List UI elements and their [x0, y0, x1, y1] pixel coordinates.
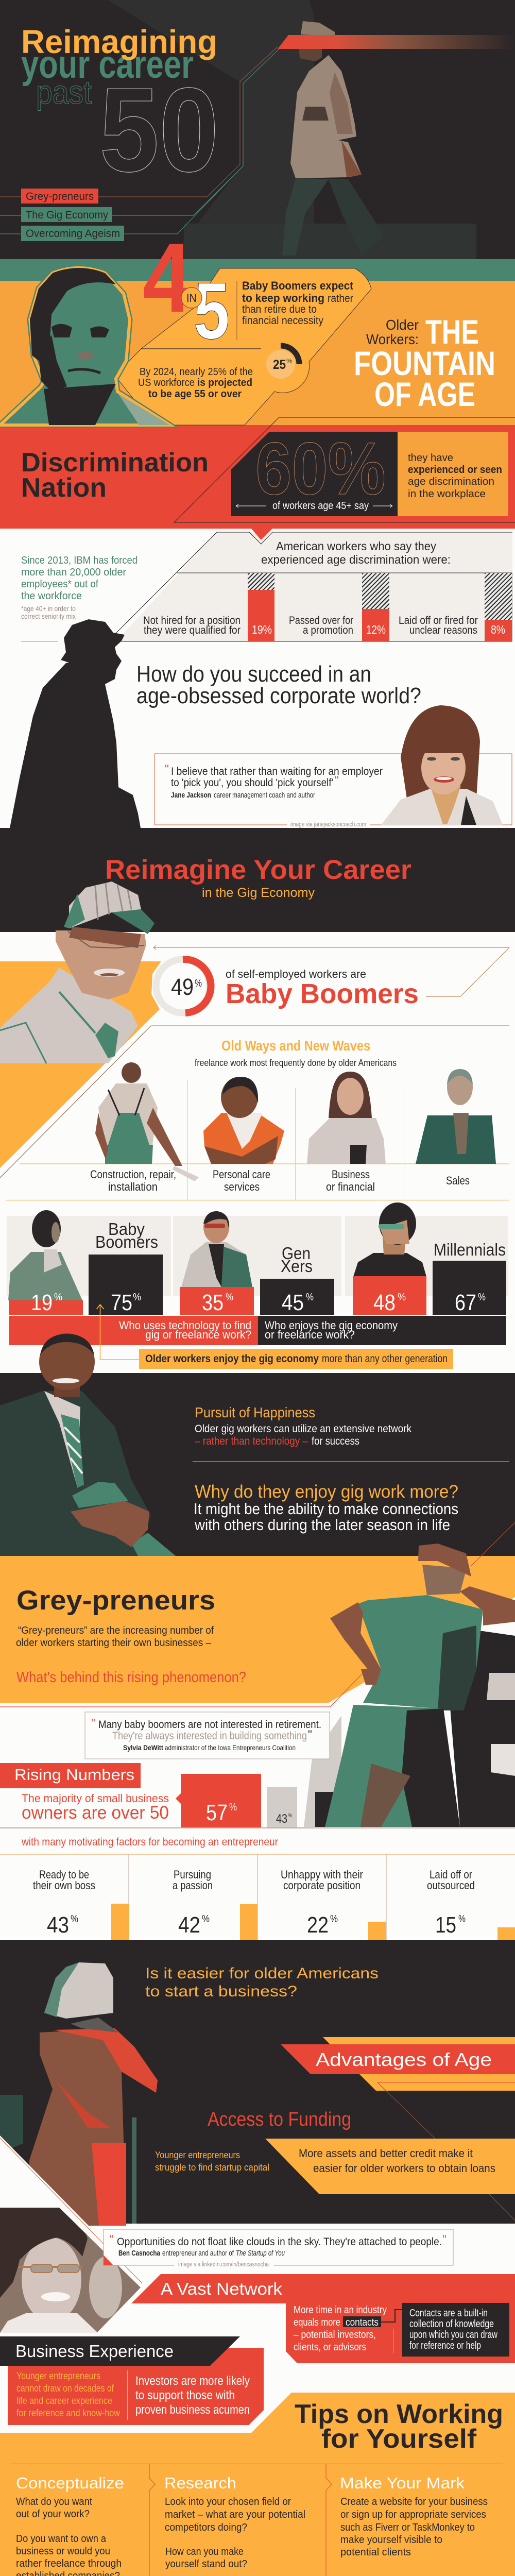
bar values: % [306, 1292, 314, 1303]
panel: tips on working for yourself [0, 2393, 515, 2576]
heading: how do you succeed: How do you succeed in an [136, 662, 371, 687]
panel: business experience: Investors are more likely [135, 2374, 250, 2388]
quote: jane jackson: " [165, 762, 169, 775]
text: definition: “Grey-preneurs” are the increasing number of [18, 1625, 214, 1636]
quote: sylvia dewitt: " [91, 1717, 95, 1730]
text: majority of owners: owners are over 50 [22, 1803, 169, 1823]
panel: hero [0, 0, 515, 259]
text: workforce projection [138, 366, 253, 400]
quote: ben casnocha: Ben Casnocha [118, 2249, 161, 2258]
bar: 57 percent [176, 1774, 261, 1827]
panel: a vast network [131, 2274, 515, 2363]
callout: experienced discrimination: they have [408, 452, 453, 464]
orange backdrop [0, 961, 161, 1168]
occupation labels: Construction, repair, [90, 1168, 176, 1181]
factor: laid off: Laid off or [430, 1868, 472, 1881]
quote: jane jackson: Jane Jackson [171, 791, 211, 800]
text: why do they enjoy: with others during the later season in life [194, 1516, 450, 1534]
panel: pursuit of happiness [0, 1333, 515, 1566]
factor: unhappy: Unhappy with their [281, 1868, 363, 1881]
column: research: competitors doing? [165, 2522, 247, 2533]
panel: advantages of age [0, 1962, 515, 2425]
photo: man portrait [0, 268, 170, 425]
factor: laid off: 15 [435, 1912, 456, 1938]
column: conceptualize: rather freelance through [16, 2558, 122, 2569]
panel: business experience: proven business acumen [135, 2403, 250, 2417]
chart: 25 percent donut [266, 346, 299, 379]
arrow: to 75 percent [97, 1304, 139, 1360]
panel: a vast network: clients, or advisors [294, 2342, 366, 2353]
heading: is it easier: Is it easier for older Americans [145, 1965, 379, 1982]
heading: american workers [261, 539, 451, 566]
stat: 4 in 5: 5 [194, 266, 230, 356]
text: ibm stat [21, 555, 138, 641]
heading: rising numbers: Rising Numbers [14, 1766, 134, 1784]
callout: experienced discrimination [398, 432, 508, 516]
bar values: 45 [282, 1290, 304, 1315]
callout: older workers enjoy [139, 1349, 453, 1369]
heading: older workers: Older [386, 317, 419, 333]
factor: own boss [33, 1868, 129, 1940]
bar values: 19 [31, 1290, 53, 1315]
topic tag: Grey-preneurs: Grey-preneurs [26, 191, 94, 202]
photo: salesman [416, 1069, 496, 1164]
quote: jane jackson: I believe that rather than waiting for an employer [171, 766, 383, 777]
text: younger entrepreneurs: struggle to find startup capital [155, 2162, 269, 2173]
occupation labels: installation [108, 1180, 158, 1193]
title [21, 23, 219, 197]
legend: who enjoys gig economy: Who enjoys the gig economy [265, 1319, 398, 1332]
callout: experienced discrimination: age discrimination [408, 476, 494, 487]
title: past [36, 74, 92, 111]
photo: construction worker [95, 1062, 199, 1181]
column: research: How can you make [165, 2546, 244, 2557]
heading [21, 448, 209, 503]
text: workforce projection: to be age 55 or over [148, 388, 242, 400]
quote: ben casnocha: " [442, 2233, 447, 2246]
grid lines [187, 1080, 404, 1200]
occupation labels: or financial [326, 1180, 375, 1193]
text: baby boomers: Baby Boomers [226, 978, 419, 1009]
panel: gig economy header [0, 855, 509, 1200]
pointer [251, 529, 272, 540]
factor: passion: 42 [178, 1912, 200, 1938]
photo: personal care worker [203, 1077, 284, 1164]
panel: a vast network: Contacts are a built-in [409, 2308, 488, 2319]
heading: is it easier [145, 1965, 379, 2000]
heading: for Yourself [321, 2424, 477, 2454]
text: baby boomers expect: rather [328, 293, 353, 304]
heading: older workers [354, 313, 495, 413]
text: baby boomers: of self-employed workers are [226, 968, 366, 980]
occupation labels [90, 1168, 470, 1193]
text: pursuit of happiness: for success [312, 1435, 359, 1447]
column: research: yourself stand out? [165, 2558, 247, 2570]
heading: Reimagine Your Career [105, 855, 411, 885]
photo: ben casnocha [0, 2208, 144, 2334]
panel: business experience: Business Experience [15, 2342, 174, 2361]
factor: laid off: outsourced [427, 1879, 475, 1892]
callout: experienced discrimination: in the workplace [408, 488, 486, 500]
column: research: Research [164, 2474, 236, 2492]
stat panel shape [115, 268, 371, 425]
factor: laid off [427, 1868, 515, 1940]
heading: old ways and new waves [195, 1038, 397, 1068]
text: motivating factors: with many motivating factors for becoming an entrepreneur [21, 1836, 278, 1848]
chart: 49 percent ring [156, 959, 211, 1013]
callout: older workers enjoy: more than any other generation [322, 1353, 448, 1365]
callout: assets and credit [265, 2139, 515, 2194]
text: baby boomers expect: to keep working [242, 292, 324, 304]
heading: access to funding: Access to Funding [208, 2109, 351, 2130]
panel: a vast network: More time in an industry [294, 2304, 387, 2316]
bar values: 75 [111, 1290, 132, 1315]
heading: Discrimination [21, 448, 209, 478]
silhouette: old man with cane [10, 619, 141, 828]
text: baby boomers expect: financial necessity [242, 315, 323, 327]
quote: jane jackson: " [335, 774, 339, 787]
heading: Nation [21, 473, 107, 503]
topic tag: The Gig Economy: The Gig Economy [26, 209, 108, 221]
topic tag: Overcoming Ageism: Overcoming Ageism [26, 228, 120, 240]
factor: unhappy: % [330, 1913, 338, 1925]
banner: advantages of age [281, 2037, 515, 2091]
quote: sylvia dewitt: " [308, 1728, 312, 1741]
bar values: 67 [455, 1290, 476, 1315]
quote: jane jackson: to 'pick you', you should 'pick yourself' [171, 777, 333, 789]
column: conceptualize: Do you want to own a [16, 2533, 107, 2545]
text: workforce projection: By 2024, nearly 25% of the [140, 366, 253, 378]
title: 50 [99, 63, 219, 197]
stat: 4 in 5: IN [186, 292, 197, 304]
divider line [236, 281, 237, 340]
quote: sylvia dewitt [85, 1712, 330, 1759]
bar chart: discrimination types: 19% [252, 623, 272, 636]
heading [105, 855, 411, 900]
heading: how do you succeed: age-obsessed corporate world? [136, 683, 421, 708]
stat: 60 percent: 60% [255, 427, 386, 510]
factor: own boss: Ready to be [39, 1868, 89, 1881]
quote: ben casnocha [104, 2229, 453, 2268]
occupation labels: Business [332, 1168, 370, 1181]
column: make your mark: Create a website for your business [340, 2496, 488, 2507]
legend: who uses technology [9, 1316, 258, 1345]
factor: own boss: 43 [47, 1912, 69, 1938]
text: ibm stat: more than 20,000 older [21, 567, 126, 578]
column: conceptualize: business or would you [16, 2546, 110, 2557]
panel: discrimination nation [21, 417, 515, 522]
column: make your mark: make yourself visible to [340, 2534, 442, 2546]
connector arrow [153, 945, 509, 996]
text: workforce projection: US workforce [138, 377, 195, 388]
heading: older workers: Workers: [366, 331, 419, 347]
panel: business experience: cannot draw on decades of [16, 2383, 114, 2394]
photo: woman in red coat [0, 1962, 158, 2226]
title: your career [21, 43, 194, 87]
white wedge [0, 2136, 89, 2226]
callout: older workers enjoy: Older workers enjoy the gig economy [145, 1353, 319, 1365]
quote: jane jackson: image via janejacksoncoach.com [290, 820, 366, 828]
bar chart: discrimination types: they were qualified for [144, 624, 241, 636]
panel: business experience [0, 2336, 264, 2425]
factor: unhappy: 22 [307, 1912, 329, 1938]
column: research [164, 2474, 305, 2570]
heading: older workers: THE [425, 313, 479, 351]
text: majority of owners [22, 1792, 169, 1823]
factor: passion [173, 1868, 258, 1940]
text: younger entrepreneurs [155, 2150, 269, 2173]
generation labels: Xers [281, 1257, 313, 1276]
panel: business experience: Younger entrepreneurs [16, 2371, 100, 2382]
panel: a vast network: A Vast Network [161, 2279, 283, 2298]
bar values: % [398, 1292, 406, 1303]
column: make your mark: potential clients [340, 2547, 411, 2558]
text: baby boomers expect [242, 279, 354, 327]
text: pursuit of happiness: – rather than technology – [195, 1435, 308, 1447]
column: make your mark: or sign up for appropriate services [340, 2509, 486, 2520]
text: definition: older workers starting their own businesses – [16, 1637, 212, 1649]
quote: sylvia dewitt: administrator of the Iowa Entrepreneurs Coalition [165, 1743, 296, 1752]
panel: a vast network: equals more [294, 2317, 340, 2328]
generation labels [95, 1219, 506, 1276]
panel: fountain of age [0, 223, 495, 425]
heading [295, 2399, 503, 2454]
stat: 4 in 5: 4 [143, 223, 192, 333]
bar values: % [478, 1292, 486, 1303]
photo: jane jackson [381, 705, 503, 825]
panel: business experience: for reference and know-how [16, 2408, 120, 2419]
heading: old ways and new waves: freelance work most frequently done by older Americans [195, 1058, 397, 1068]
legend: who enjoys gig economy: or freelance work? [265, 1328, 355, 1341]
chart: 25 percent donut: % [286, 358, 292, 364]
column: conceptualize: Conceptualize [16, 2474, 124, 2492]
text: pursuit of happiness: Older gig workers can utilize an extensive network [195, 1423, 411, 1435]
column: conceptualize [16, 2474, 124, 2576]
bar values: % [133, 1292, 141, 1303]
panel: a vast network: collection of knowledge [409, 2318, 494, 2330]
bar values: % [226, 1292, 233, 1303]
quote: ben casnocha: image via linkedin.com/in/bencasnocha [178, 2260, 269, 2268]
bar chart: discrimination types: 8% [491, 623, 505, 636]
text: ibm stat: correct seniority mix [21, 612, 76, 620]
bar chart: discrimination types: 12% [366, 623, 386, 636]
quote: ben casnocha: Opportunities do not float like clouds in the sky. They're attached to people. [117, 2236, 442, 2248]
chart: 49 percent ring: % [195, 978, 202, 989]
photo: business woman [307, 1072, 386, 1164]
text: definition [16, 1625, 246, 1686]
text: baby boomers expect: than retire due to [242, 303, 317, 315]
column: conceptualize: What do you want [16, 2496, 92, 2507]
chart: 25 percent donut: 25 [273, 358, 286, 372]
stat: 60 percent: of workers age 45+ say [272, 500, 369, 512]
heading: old ways and new waves: Old Ways and New Waves [221, 1038, 370, 1054]
bars [9, 1255, 506, 1315]
stat: 4 in 5 [143, 223, 230, 356]
generation labels: Baby [108, 1219, 145, 1239]
factor: passion: % [202, 1913, 210, 1925]
heading: how do you succeed [136, 662, 421, 708]
banner: advantages of age: Advantages of Age [316, 2049, 492, 2070]
bar: 43 percent: 43 [276, 1812, 287, 1826]
text: ibm stat: *age 40+ in order to [21, 604, 76, 613]
panel: corporate world [10, 529, 512, 828]
column: research: market – what are your potential [165, 2509, 305, 2520]
quote: sylvia dewitt: They're always interested in building something [112, 1730, 307, 1742]
heading: in the Gig Economy [202, 886, 315, 900]
panel: generations bar chart [7, 1202, 508, 1369]
quote: ben casnocha: entrepreneur and author of [162, 2249, 234, 2258]
column: make your mark: such as Fiverr or TaskMonkey to [340, 2522, 475, 2533]
quote: jane jackson: career management coach and author [214, 791, 315, 800]
column: make your mark [340, 2474, 488, 2558]
text: pursuit of happiness: Pursuit of Happiness [195, 1404, 315, 1420]
text: ibm stat: employees* out of [21, 579, 98, 590]
bar values: % [54, 1292, 62, 1303]
heading: american workers: experienced age discrimination were: [261, 553, 451, 566]
callout: assets and credit: More assets and better credit make it [299, 2147, 473, 2160]
text: workforce projection: is projected [197, 377, 252, 388]
text: baby boomers expect: Baby Boomers expect [242, 279, 354, 292]
bar: 57 percent: % [229, 1802, 237, 1813]
text: why do they enjoy: Why do they enjoy gig work more? [195, 1482, 458, 1502]
text: ibm stat: Since 2013, IBM has forced [21, 555, 138, 566]
quote: sylvia dewitt: Sylvia DeWitt [123, 1743, 163, 1752]
column: make your mark: Make Your Mark [340, 2474, 465, 2492]
factor: passion: a passion [173, 1879, 213, 1892]
legend: who enjoys gig economy [258, 1316, 506, 1345]
legend: who uses technology: gig or freelance work? [145, 1328, 251, 1341]
factor: laid off: % [458, 1913, 466, 1925]
text: younger entrepreneurs: Younger entrepreneurs [155, 2150, 240, 2160]
text: pursuit of happiness [195, 1404, 411, 1447]
bar chart: discrimination types: a promotion [303, 624, 353, 636]
photo: man in striped cap [0, 882, 154, 1063]
column: research: Look into your chosen field or [165, 2496, 291, 2507]
bar chart: discrimination types: unclear reasons [409, 624, 477, 636]
chart: 49 percent ring: 49 [171, 974, 194, 1000]
heading: Grey-preneurs [16, 1585, 215, 1616]
heading: older workers: OF AGE [374, 375, 475, 413]
panel: business experience: to support those with [135, 2388, 235, 2402]
text: definition: What's behind this rising phenomenon? [16, 1669, 246, 1686]
text: why do they enjoy: It might be the ability to make connections [194, 1500, 458, 1518]
factor: unhappy [281, 1868, 386, 1940]
bar: 43 percent: % [288, 1812, 292, 1819]
photo: gen xer [181, 1211, 252, 1287]
text: ibm stat: the workforce [21, 590, 82, 602]
bar chart: discrimination types: Not hired for a position [143, 615, 241, 626]
panel: business experience: life and career experience [16, 2396, 112, 2406]
text: why do they enjoy [194, 1482, 458, 1534]
heading: american workers: American workers who say they [276, 539, 436, 553]
panel: grey-preneurs [0, 1544, 515, 1940]
occupation labels: services [224, 1180, 260, 1193]
photo: walking man [282, 21, 384, 256]
red banner bar [278, 35, 515, 49]
panel: a vast network: contacts [346, 2317, 379, 2328]
photo: man in suit [0, 1333, 176, 1556]
photo: boomer worker [8, 1210, 82, 1300]
bar chart: discrimination types: Passed over for [289, 615, 353, 626]
bar values: 35 [202, 1290, 224, 1315]
photo: millennial [353, 1202, 426, 1277]
bar: 57 percent: 57 [206, 1800, 228, 1825]
bar chart: discrimination types: Laid off or fired for [399, 615, 478, 626]
generation labels: Boomers [95, 1232, 158, 1251]
legend: who uses technology: Who uses technology to find [119, 1319, 251, 1332]
occupation labels: Personal care [213, 1168, 270, 1181]
quote: sylvia dewitt: Many baby boomers are not interested in retirement. [98, 1719, 321, 1731]
text: majority of owners: The majority of small business [22, 1792, 169, 1805]
bar chart: discrimination types [121, 573, 512, 641]
callout: experienced discrimination: experienced or seen [408, 464, 502, 476]
quote: ben casnocha: The Startup of You [236, 2249, 285, 2258]
factor: passion: Pursuing [174, 1868, 211, 1881]
generation labels: Millennials [434, 1240, 506, 1259]
panel: a vast network: for reference or help [409, 2340, 481, 2351]
factor: own boss: % [71, 1913, 78, 1925]
quote: ben casnocha: " [110, 2233, 114, 2246]
factor: unhappy: corporate position [283, 1879, 360, 1892]
heading: is it easier: to start a business? [145, 1983, 297, 2000]
bar values [31, 1290, 486, 1315]
factor: own boss: their own boss [33, 1879, 95, 1892]
heading: rising numbers [0, 1763, 141, 1788]
bar: 43 percent [267, 1787, 297, 1827]
quote: jane jackson [154, 754, 512, 828]
callout: assets and credit: easier for older workers to obtain loans [313, 2162, 495, 2175]
photo: man leaning on car [304, 1544, 515, 1827]
column: conceptualize: out of your work? [16, 2509, 90, 2520]
heading: Tips on Working [295, 2399, 503, 2429]
occupation labels: Sales [446, 1174, 470, 1187]
generation labels: Gen [282, 1244, 311, 1263]
title: Reimagining [21, 23, 217, 60]
bar values: 48 [373, 1290, 396, 1315]
panel: a vast network: – potential investors, [294, 2329, 376, 2341]
